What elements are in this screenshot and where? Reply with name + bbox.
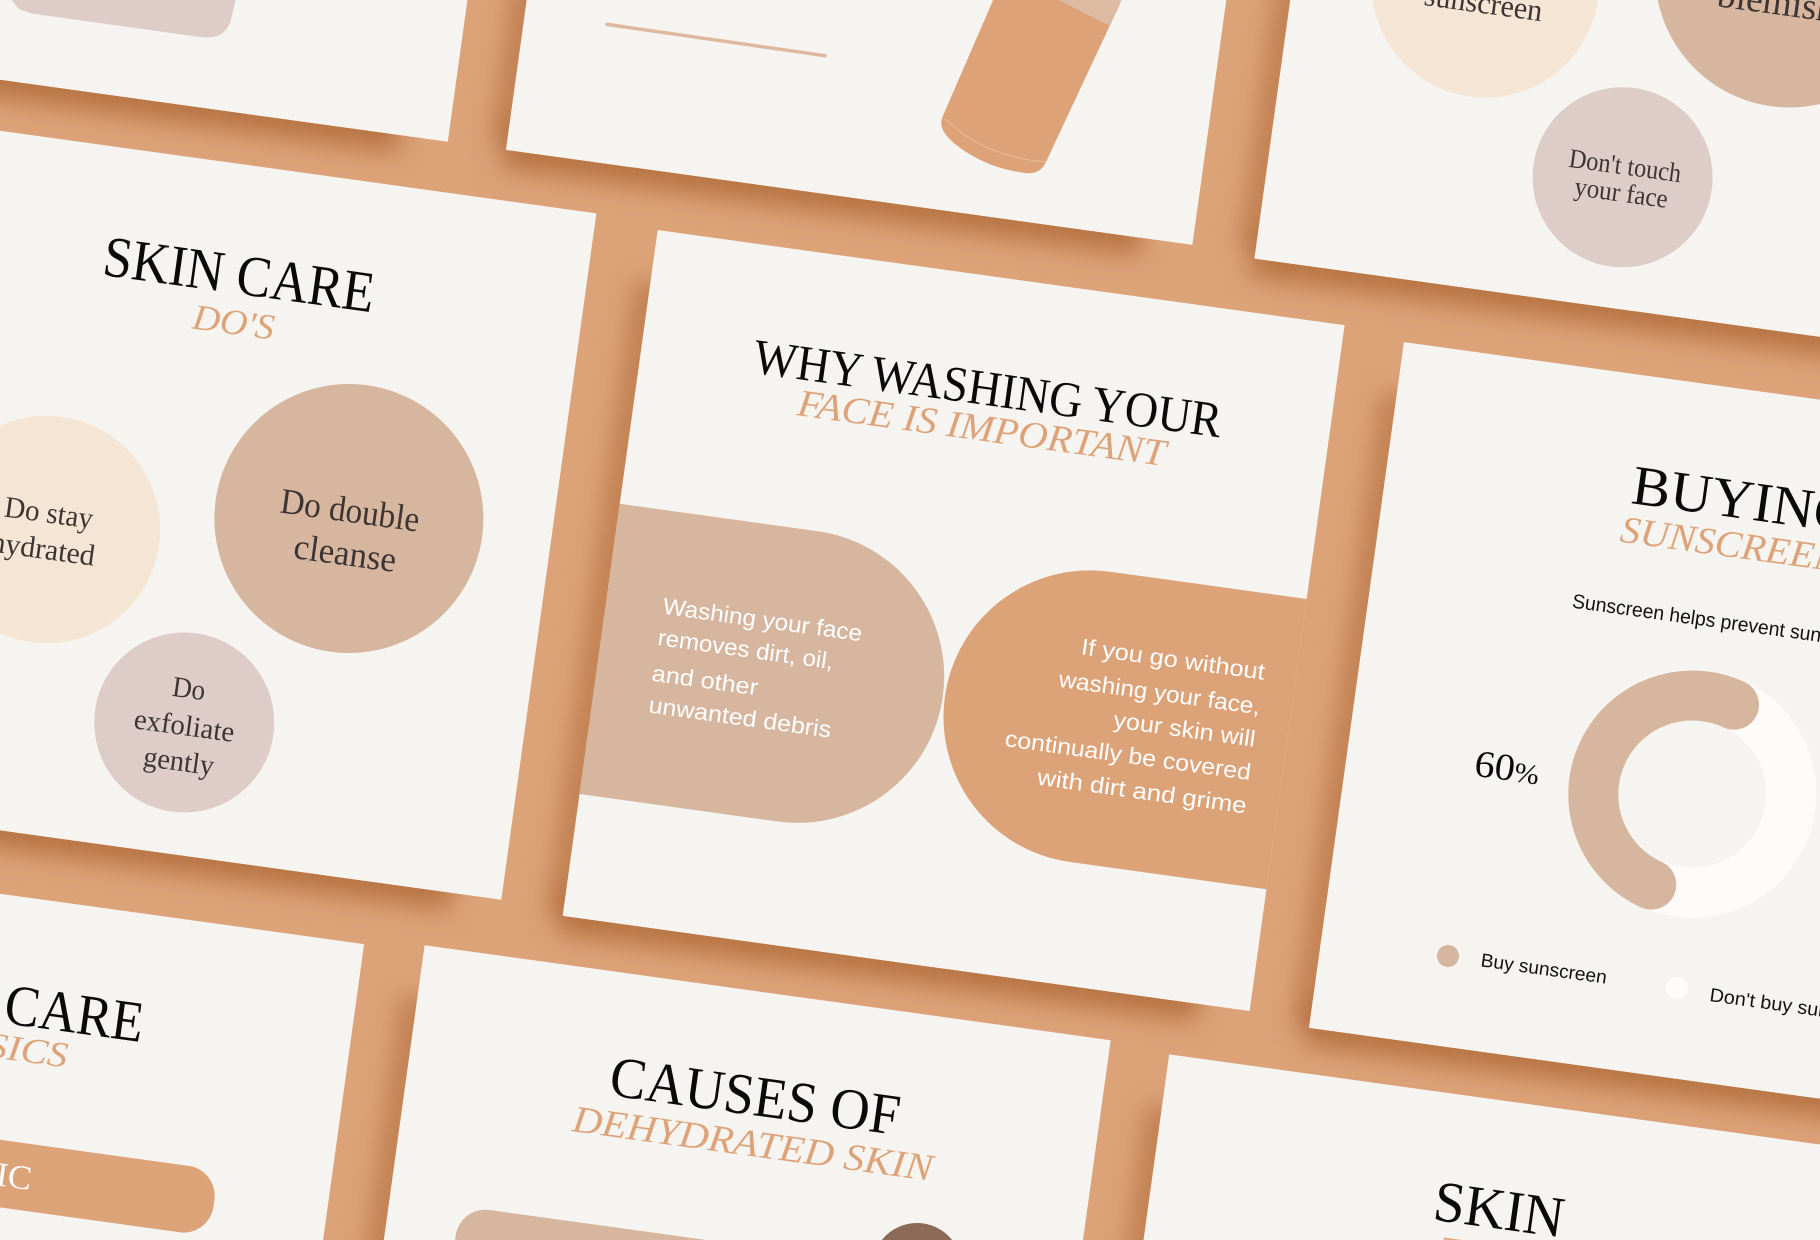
legend: buy sunscreen — [1437, 945, 1608, 989]
text block: not washing consequence: continually be covered — [1003, 725, 1253, 785]
text block: washing benefit: and other — [650, 660, 760, 700]
heading: causes of: CAUSES OF — [606, 1043, 904, 1148]
orange pill: basic — [0, 1105, 219, 1236]
panel: skin types slide — [1144, 1054, 1820, 1240]
panel: skin care do's slide — [0, 115, 596, 900]
donut chart — [1593, 695, 1791, 893]
tan pill shape — [580, 504, 963, 842]
panel: skin care don'ts slide — [1254, 0, 1820, 355]
subheading: face is important: FACE IS IMPORTANT — [794, 382, 1171, 475]
text block: washing benefit: removes dirt, oil, — [656, 624, 835, 674]
heading: skin care: SKIN CARE — [100, 223, 379, 325]
text block: not washing consequence: If you go without — [1080, 634, 1267, 685]
subheading: do's: DO'S — [189, 297, 277, 348]
percentage label: 60% — [1472, 743, 1542, 793]
text block: not washing consequence — [1003, 634, 1267, 818]
subheading: dehydrated skin: DEHYDRATED SKIN — [569, 1098, 938, 1190]
mauve rounded box — [10, 0, 236, 38]
panel: top-middle slide — [506, 0, 1244, 245]
tan divider line — [607, 24, 825, 56]
legend: don't buy sunscreen — [1666, 977, 1820, 1031]
text block: washing benefit — [647, 593, 864, 743]
brown circle — [882, 1223, 952, 1240]
circle: don't touch your face — [1533, 87, 1713, 267]
circle: double cleanse: cleanse — [291, 526, 399, 580]
circle: don't touch your face: Don't touch — [1567, 143, 1684, 188]
circle: exfoliate gently — [94, 632, 274, 812]
text block: washing benefit: unwanted debris — [647, 692, 833, 743]
circle: blemishes — [1655, 0, 1820, 108]
orange pill shape — [925, 552, 1307, 889]
text block: not washing consequence: washing your face, — [1056, 666, 1262, 719]
text block: not washing consequence: with dirt and grime — [1035, 764, 1248, 818]
text block: not washing consequence: your skin will — [1112, 706, 1257, 752]
heading: why washing your: WHY WASHING YOUR — [750, 328, 1226, 448]
circle: double cleanse — [214, 384, 483, 653]
circle: sunscreen — [1372, 0, 1599, 98]
panel: causes of dehydrated skin slide — [384, 945, 1111, 1240]
panel: why washing your face is important slide — [563, 230, 1345, 1011]
icon: product bottle — [941, 0, 1122, 173]
circle: exfoliate gently: exfoliate — [132, 703, 236, 749]
panel: top-left slide — [0, 0, 500, 142]
circle: exfoliate gently: gently — [141, 741, 217, 782]
circle: don't touch your face: your face — [1573, 171, 1670, 214]
panel: buying sunscreen slide — [1309, 342, 1820, 1124]
circle: stay hydrated — [0, 416, 160, 643]
tan rounded box — [455, 1210, 706, 1240]
circle: double cleanse: Do double — [278, 481, 422, 540]
circle: exfoliate gently: Do — [170, 671, 207, 707]
legend: buy sunscreen: Buy sunscreen — [1479, 950, 1608, 989]
panel: skin care basics slide — [0, 894, 364, 1240]
text block: washing benefit: Washing your face — [661, 593, 864, 646]
circle: stay hydrated: Do stay — [2, 491, 95, 536]
